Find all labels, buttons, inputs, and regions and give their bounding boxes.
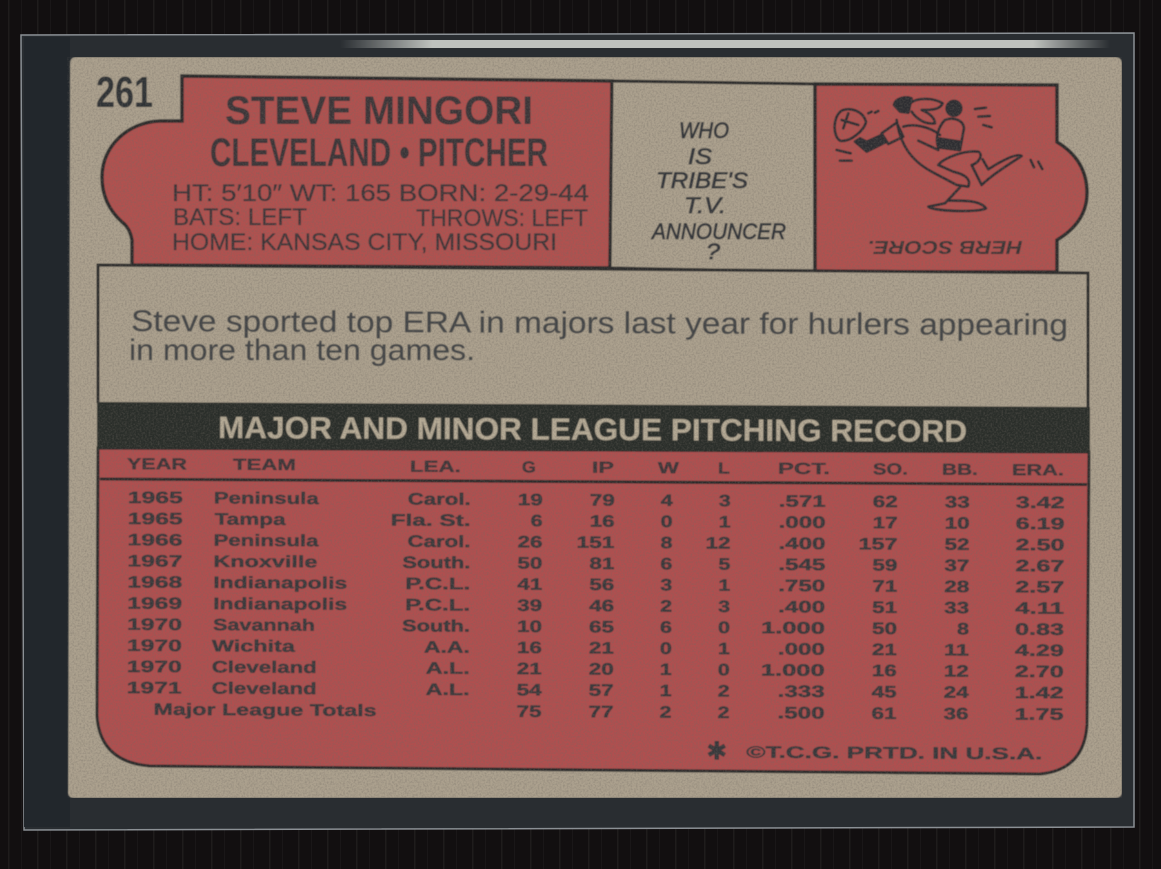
row 1968 Indianapolis: 56: [589, 576, 614, 594]
throws: THROWS: LEFT: [416, 205, 588, 232]
row 1970 Cleveland: Cleveland: [212, 658, 317, 677]
row 1968 Indianapolis: 1: [718, 577, 730, 595]
row 1968 Indianapolis: 2.57: [1015, 578, 1064, 597]
row 1970 Wichita: Wichita: [212, 637, 296, 656]
row 1970 Cleveland: 0: [718, 661, 730, 679]
column headers: TEAM: [233, 457, 296, 474]
row 1970 Wichita: 11: [944, 641, 969, 660]
panel: biography: Steve sported top ERA in majors last year for hurlers appearing: [131, 305, 1068, 342]
row 1968 Indianapolis: [127, 573, 1064, 597]
row 1970 Savannah: 1970: [127, 616, 182, 634]
column headers: YEAR: [127, 456, 188, 473]
row 1971 Cleveland: 24: [944, 684, 970, 702]
cartoon caption: HERB SCORE.: [868, 237, 1022, 257]
card paper: [68, 57, 1122, 798]
row 1971 Cleveland: 1: [660, 682, 672, 700]
row 1971 Cleveland: .333: [778, 683, 825, 701]
card number: 261: [96, 68, 153, 117]
row 1971 Cleveland: 1971: [127, 679, 182, 697]
row 1965 Peninsula: 62: [873, 493, 898, 511]
row 1970 Wichita: 0: [660, 640, 672, 658]
row 1970 Savannah: Savannah: [213, 616, 315, 635]
panel: biography: [98, 265, 1088, 408]
row 1969 Indianapolis: .400: [778, 598, 825, 617]
row 1970 Cleveland: 1.000: [761, 661, 825, 680]
column headers: IP: [592, 460, 614, 477]
panel: trivia question: T.V.: [684, 193, 726, 218]
row 1968 Indianapolis: 41: [517, 576, 542, 594]
row 1968 Indianapolis: P.C.L.: [405, 575, 470, 593]
row 1966 Peninsula: 157: [858, 535, 898, 554]
icon: cartoon pitcher: [835, 97, 1042, 211]
row Major League Totals: .500: [777, 704, 825, 723]
row 1965 Peninsula: 1965: [128, 489, 183, 507]
row Major League Totals: 1.75: [1014, 706, 1064, 724]
row 1965 Tampa: Tampa: [215, 511, 287, 529]
height weight born: HT: 5′10″ WT: 165 BORN: 2-29-44: [172, 180, 589, 207]
panel: trivia question: IS: [688, 144, 712, 169]
row 1970 Cleveland: 21: [517, 660, 542, 678]
row 1965 Tampa: [128, 510, 1065, 533]
row Major League Totals: 61: [871, 705, 897, 723]
row 1966 Peninsula: 26: [517, 533, 543, 552]
row Major League Totals: Major League Totals: [153, 701, 377, 720]
row 1970 Savannah: 10: [517, 618, 542, 636]
row 1970 Cleveland: A.L.: [426, 660, 470, 678]
row Major League Totals: 77: [588, 703, 614, 721]
paper grain: [68, 57, 1122, 798]
row 1971 Cleveland: A.L.: [426, 681, 470, 699]
row 1969 Indianapolis: 2: [660, 598, 672, 616]
row 1970 Wichita: 21: [872, 641, 897, 659]
row 1970 Cleveland: 12: [944, 663, 969, 681]
row 1966 Peninsula: Carol.: [407, 533, 471, 551]
row 1966 Peninsula: [127, 531, 1065, 554]
row 1969 Indianapolis: 46: [589, 597, 614, 615]
row Major League Totals: 2: [659, 704, 672, 722]
row 1970 Savannah: 65: [589, 618, 614, 636]
panel: statistics table background: [97, 448, 1089, 774]
row 1970 Savannah: South.: [402, 617, 470, 636]
row 1971 Cleveland: 1.42: [1015, 684, 1064, 702]
row 1967 Knoxville: 59: [872, 557, 897, 575]
row 1967 Knoxville: 6: [660, 555, 672, 573]
row 1966 Peninsula: Peninsula: [213, 532, 320, 550]
panel: trivia question: TRIBE'S: [656, 168, 748, 193]
row 1967 Knoxville: .545: [778, 556, 825, 574]
row 1965 Peninsula: Peninsula: [214, 489, 320, 508]
bats: BATS: LEFT: [173, 204, 307, 231]
row 1966 Peninsula: .400: [778, 535, 826, 553]
panel: biography: in more than ten games.: [129, 334, 475, 367]
row 1970 Wichita: A.A.: [424, 639, 470, 657]
row 1965 Tampa: .000: [779, 514, 826, 532]
row Major League Totals: 36: [943, 705, 969, 723]
row 1965 Tampa: 6.19: [1016, 515, 1065, 533]
row 1966 Peninsula: 12: [705, 534, 731, 553]
row 1969 Indianapolis: 51: [872, 599, 897, 617]
row Major League Totals: 2: [717, 704, 730, 722]
row 1968 Indianapolis: 1968: [127, 573, 182, 592]
column headers: LEA.: [410, 459, 461, 476]
row Major League Totals: [153, 701, 1064, 724]
row 1968 Indianapolis: 3: [660, 576, 672, 594]
panel: cartoon answer: [815, 84, 1087, 272]
row 1967 Knoxville: 2.67: [1015, 557, 1064, 576]
icon: asterisk: ✱: [706, 736, 727, 766]
row 1965 Peninsula: .571: [779, 493, 826, 511]
row 1965 Peninsula: 4: [661, 492, 674, 510]
row 1970 Savannah: 8: [957, 620, 969, 638]
row 1970 Savannah: 0.83: [1015, 621, 1064, 639]
row 1965 Tampa: 1965: [128, 510, 183, 528]
row 1971 Cleveland: [127, 679, 1064, 702]
panel: trivia question: WHO: [679, 118, 729, 143]
row 1970 Wichita: 21: [589, 639, 614, 658]
row 1970 Cleveland: [127, 658, 1064, 681]
row 1965 Peninsula: 3: [719, 492, 731, 510]
row 1970 Savannah: 0: [718, 619, 730, 637]
row 1967 Knoxville: 37: [944, 557, 969, 575]
column headers: ERA.: [1012, 462, 1064, 479]
row 1965 Peninsula: 3.42: [1016, 494, 1065, 512]
row 1971 Cleveland: 45: [872, 683, 897, 701]
row 1969 Indianapolis: 33: [944, 599, 969, 617]
row 1969 Indianapolis: Indianapolis: [213, 595, 347, 614]
column headers: SO.: [873, 461, 908, 479]
row 1971 Cleveland: Cleveland: [212, 680, 317, 698]
row 1967 Knoxville: 5: [718, 556, 730, 574]
column headers: L: [718, 460, 730, 478]
row 1965 Peninsula: 19: [518, 491, 543, 509]
row 1971 Cleveland: 54: [517, 681, 543, 699]
row 1965 Tampa: 17: [873, 514, 898, 532]
row 1966 Peninsula: 2.50: [1015, 536, 1065, 554]
row 1965 Peninsula: 33: [945, 494, 970, 512]
row 1968 Indianapolis: Indianapolis: [213, 574, 347, 593]
row 1965 Tampa: Fla. St.: [391, 512, 471, 530]
row 1967 Knoxville: [127, 552, 1064, 576]
row 1970 Cleveland: 2.70: [1015, 663, 1064, 681]
row 1970 Wichita: .000: [778, 640, 825, 659]
row 1966 Peninsula: 1966: [127, 531, 183, 550]
row 1971 Cleveland: 2: [718, 682, 730, 701]
row 1965 Tampa: 16: [590, 513, 615, 531]
row Major League Totals: 75: [516, 703, 542, 721]
row 1969 Indianapolis: 1969: [127, 595, 182, 613]
row 1967 Knoxville: South.: [402, 554, 470, 572]
panel: trivia question: ?: [706, 239, 721, 264]
table heading band: [97, 402, 1090, 453]
row 1968 Indianapolis: 28: [944, 578, 969, 596]
home: HOME: KANSAS CITY, MISSOURI: [172, 229, 557, 256]
row 1966 Peninsula: 151: [576, 534, 615, 552]
row 1965 Tampa: 10: [945, 515, 970, 533]
panel: trivia question: [610, 81, 815, 272]
row 1970 Savannah: 50: [872, 620, 897, 638]
row 1969 Indianapolis: 4.11: [1015, 600, 1064, 618]
row 1970 Wichita: 1: [718, 640, 730, 658]
row 1968 Indianapolis: .750: [778, 577, 825, 595]
row 1965 Peninsula: [128, 489, 1065, 512]
row 1966 Peninsula: 52: [944, 536, 970, 554]
row 1970 Cleveland: 20: [589, 661, 614, 679]
row 1967 Knoxville: Knoxville: [213, 553, 317, 571]
column headers: G: [522, 459, 536, 476]
column headers: W: [658, 460, 680, 477]
row 1970 Cleveland: 16: [872, 662, 897, 680]
table: [98, 456, 1087, 768]
row 1965 Peninsula: 79: [590, 492, 615, 510]
column headers: BB.: [942, 462, 978, 479]
column headers: [127, 456, 1064, 479]
row 1969 Indianapolis: P.C.L.: [405, 596, 470, 615]
table heading band: MAJOR AND MINOR LEAGUE PITCHING RECORD: [218, 410, 967, 449]
row 1965 Tampa: 1: [719, 513, 731, 531]
row 1970 Wichita: 1970: [127, 637, 182, 655]
row 1970 Cleveland: 1970: [127, 658, 182, 676]
player name: STEVE MINGORI: [225, 89, 533, 133]
row 1968 Indianapolis: 71: [872, 578, 897, 596]
row 1970 Wichita: [127, 637, 1064, 660]
row 1969 Indianapolis: 3: [718, 598, 730, 616]
row 1965 Peninsula: Carol.: [408, 491, 471, 509]
row 1965 Tampa: 6: [531, 512, 543, 530]
row 1966 Peninsula: 8: [660, 534, 673, 552]
row 1969 Indianapolis: 39: [517, 597, 542, 615]
row 1967 Knoxville: 1967: [127, 552, 182, 571]
team and position: CLEVELAND • PITCHER: [210, 131, 548, 175]
row 1971 Cleveland: 57: [589, 682, 614, 700]
copyright line: ©T.C.G. PRTD. IN U.S.A.: [746, 744, 1042, 763]
panel: player info: [96, 68, 612, 268]
row 1970 Savannah: [127, 616, 1064, 639]
row 1967 Knoxville: 50: [517, 555, 542, 573]
row 1970 Wichita: 4.29: [1015, 642, 1064, 660]
row 1970 Cleveland: 1: [660, 661, 672, 679]
row 1970 Savannah: 6: [660, 619, 672, 637]
row 1965 Tampa: 0: [661, 513, 673, 531]
row 1970 Savannah: 1.000: [761, 619, 825, 638]
row 1967 Knoxville: 81: [589, 555, 614, 573]
column headers: PCT.: [778, 461, 830, 478]
row 1970 Wichita: 16: [517, 639, 542, 657]
panel: trivia question: ANNOUNCER: [650, 219, 786, 244]
row 1969 Indianapolis: [127, 595, 1064, 618]
